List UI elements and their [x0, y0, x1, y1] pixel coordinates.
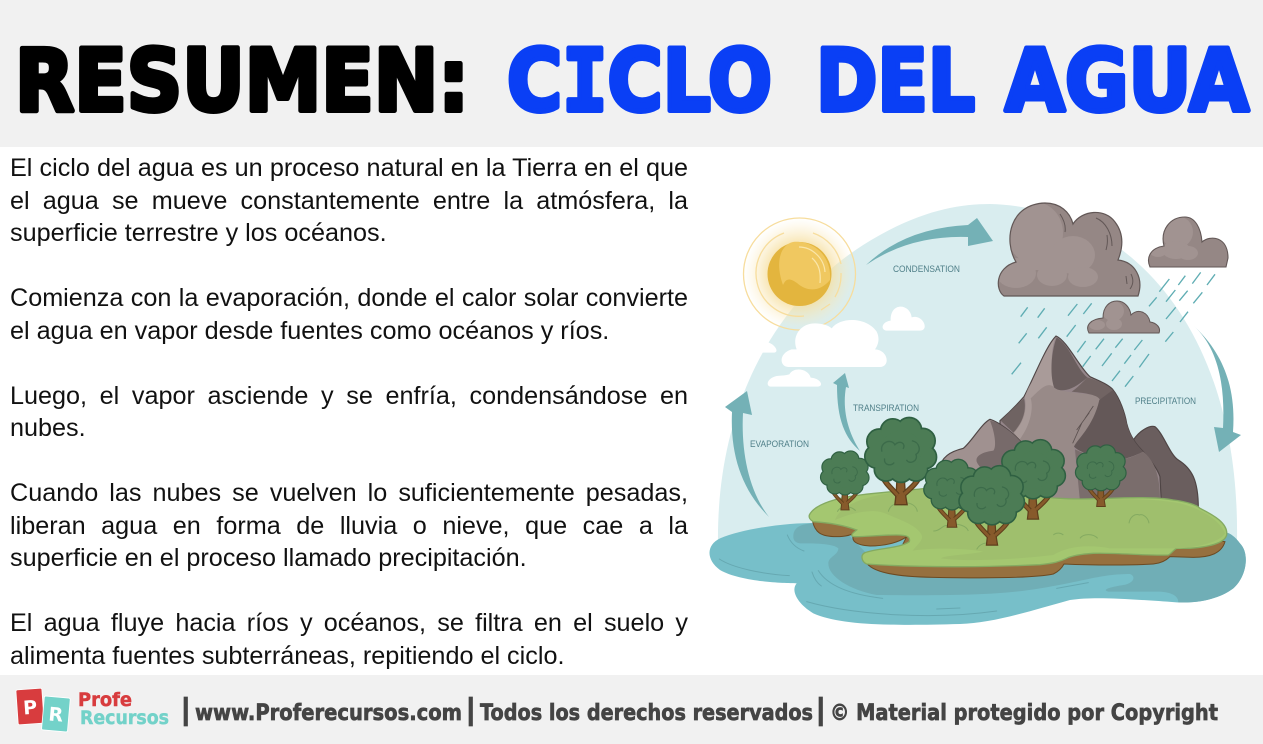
storm clouds — [996, 202, 1228, 333]
text block: summary paragraphs — [10, 154, 688, 670]
text block: summary paragraphs: Cuando las nubes se vuelven lo suficientemente pesadas, — [10, 479, 688, 507]
water shadow — [793, 523, 1246, 602]
mountains — [938, 336, 1198, 508]
logo wordmark: recursos: Recursos — [80, 707, 169, 729]
arrow: evaporation — [725, 391, 769, 517]
title: ciclo del agua: DEL — [816, 32, 975, 132]
text block: summary paragraphs: superficie terrestre y los océanos. — [10, 219, 387, 247]
text block: summary paragraphs: El ciclo del agua es un proceso natural en la Tierra en el que — [10, 154, 688, 182]
tree 5 — [1001, 440, 1065, 519]
text block: summary paragraphs: nubes. — [10, 414, 86, 442]
title: ciclo del agua — [507, 32, 1249, 132]
logo card: P: P — [22, 697, 38, 719]
island grass — [809, 488, 1227, 567]
water — [709, 523, 1246, 625]
rain — [1012, 272, 1215, 387]
text block: summary paragraphs: Comienza con la evaporación, donde el calor solar convierte — [10, 284, 688, 312]
text block: summary paragraphs: liberan agua en forma de lluvia o nieve, que cae a la — [10, 512, 688, 540]
cloud: small right — [1149, 216, 1228, 267]
title band — [0, 0, 1263, 147]
tree 4 — [960, 466, 1024, 545]
label: precipitation: PRECIPITATION — [1135, 396, 1196, 407]
mountain: back right — [1130, 426, 1198, 508]
text block: summary paragraphs: el agua se mueve constantemente entre la atmósfera, la — [10, 186, 688, 214]
label: transpiration: TRANSPIRATION — [853, 403, 919, 414]
label: condensation: CONDENSATION — [893, 264, 960, 275]
white clouds — [755, 307, 925, 387]
text block: summary paragraphs: superficie en el proceso llamado precipitación. — [10, 544, 527, 572]
cloud: large — [996, 202, 1140, 296]
footer credits — [184, 697, 1218, 726]
logo card: P — [16, 688, 44, 725]
logo card: R — [41, 696, 70, 732]
sun — [744, 218, 856, 330]
tree 1 — [821, 452, 868, 510]
arrow: transpiration — [833, 373, 860, 451]
cloud: small middle — [1088, 301, 1160, 333]
logo card: R: R — [48, 703, 64, 727]
tree 2 — [866, 418, 936, 505]
arrow: precipitation — [1194, 326, 1241, 452]
logo wordmark: profe: Profe — [78, 689, 132, 711]
footer band — [0, 675, 1263, 744]
tree 6 — [1076, 446, 1125, 506]
island cliffs — [813, 520, 1225, 578]
arrow: condensation — [866, 218, 993, 265]
island — [809, 488, 1227, 578]
footer credits: Todos los derechos reservados — [480, 700, 813, 726]
label: evaporation: EVAPORATION — [750, 439, 809, 450]
text block: summary paragraphs: Luego, el vapor asciende y se enfría, condensándose en — [10, 382, 688, 410]
tree 3 — [924, 460, 979, 527]
text block: summary paragraphs: El agua fluye hacia ríos y océanos, se filtra en el suelo y — [10, 609, 688, 637]
footer credits: www.Proferecursos.com — [195, 700, 462, 726]
mountain: small left — [938, 419, 1027, 480]
illustration: water cycle — [710, 202, 1246, 625]
background circle — [718, 204, 1237, 545]
text block: summary paragraphs: alimenta fuentes subterráneas, repitiendo el ciclo. — [10, 642, 564, 670]
text block: summary paragraphs: el agua en vapor desde fuentes como océanos y ríos. — [10, 316, 609, 344]
island shading — [835, 489, 1225, 560]
mountain: main — [1000, 336, 1162, 508]
title: ciclo del agua: CICLO — [507, 32, 772, 132]
title: resumen: RESUMEN: — [15, 32, 469, 132]
logo — [16, 688, 169, 732]
